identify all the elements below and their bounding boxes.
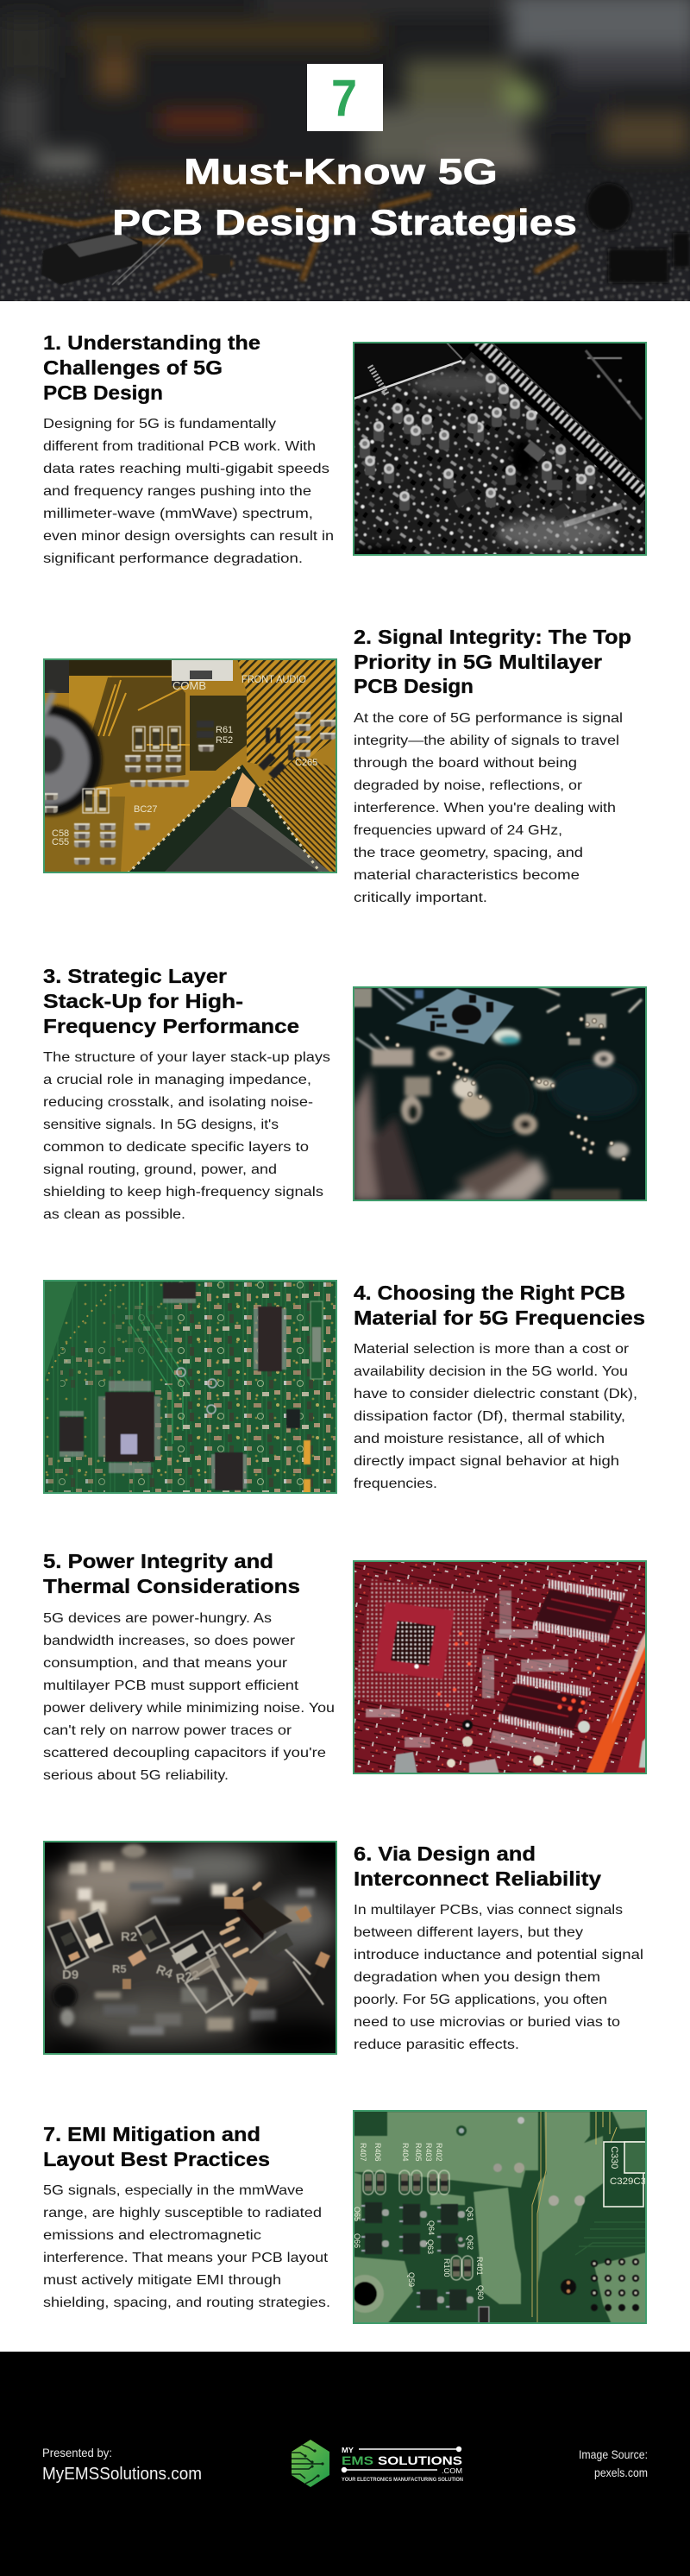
body text 4: dissipation factor (Df), thermal stability, xyxy=(354,1409,625,1424)
body text 5: scattered decoupling capacitors if you're xyxy=(43,1746,326,1760)
photo: dark circuit board close-up xyxy=(22,1825,367,2064)
badge: number 7: 7 xyxy=(331,69,357,127)
photo: gold circuit board: R52 xyxy=(216,735,233,746)
photo: dark circuit board close-up: D9 xyxy=(62,1968,78,1982)
photo: green circuit board xyxy=(43,1280,337,1494)
photo: sage green circuit board: Q60 xyxy=(476,2285,485,2300)
heading 5: 5. Power Integrity and xyxy=(43,1550,273,1572)
body text 7: interference. That means your PCB layout xyxy=(43,2251,329,2265)
body text 7: must actively mitigate EMI through xyxy=(43,2273,281,2288)
heading 3: 3. Strategic Layer xyxy=(43,965,227,987)
body text 6: In multilayer PCBs, vias connect signals xyxy=(354,1903,623,1918)
body text 2: material characteristics become xyxy=(354,868,580,883)
presented by: MyEMSSolutions.com xyxy=(42,2465,202,2484)
body text 6: need to use microvias or buried vias to xyxy=(354,2015,620,2030)
circuit speckle xyxy=(0,180,690,301)
body text 1: millimeter-wave (mmWave) spectrum, xyxy=(43,507,313,521)
heading 2: PCB Design xyxy=(354,675,474,697)
section 7: EMI mitigation xyxy=(43,2110,647,2324)
heading 7: Layout Best Practices xyxy=(43,2148,270,2170)
body text 5: power delivery while minimizing noise. You xyxy=(43,1701,335,1716)
photo: gold circuit board: R61 xyxy=(216,725,233,735)
footer xyxy=(0,2352,690,2576)
body text 6: degradation when you design them xyxy=(354,1970,600,1985)
photo: gold circuit board: C265 xyxy=(295,758,317,768)
body text 6 xyxy=(354,1903,643,2052)
heading 1 xyxy=(43,331,260,404)
photo: sage green circuit board: Q63 xyxy=(426,2239,435,2254)
body text 3: as clean as possible. xyxy=(43,1207,185,1222)
body text 1: even minor design oversights can result in xyxy=(43,529,334,544)
body text 6: between different layers, but they xyxy=(354,1925,583,1940)
photo: dark teal blurred board xyxy=(353,986,647,1201)
heading 1: Challenges of 5G xyxy=(43,356,223,379)
logo wordmark: MY xyxy=(342,2447,354,2454)
photo: sage green circuit board: R403 xyxy=(424,2143,433,2162)
title xyxy=(112,151,577,242)
heading 3: Frequency Performance xyxy=(43,1015,299,1037)
photo: gold circuit board xyxy=(0,658,337,873)
photo: black and white circuit board xyxy=(348,340,647,559)
photo: sage green circuit board: Q66 xyxy=(353,2233,361,2248)
badge: number 7 xyxy=(307,64,383,131)
presented by xyxy=(42,2446,202,2484)
heading 6: Interconnect Reliability xyxy=(354,1867,601,1890)
title: Must-Know 5G xyxy=(184,151,498,192)
body text 1: significant performance degradation. xyxy=(43,551,303,566)
body text 7 xyxy=(43,2183,330,2310)
heading 1: 1. Understanding the xyxy=(43,331,260,354)
header photo background xyxy=(0,0,690,301)
body text 2: through the board without being xyxy=(354,756,577,771)
heading 5 xyxy=(43,1550,300,1597)
body text 3: shielding to keep high-frequency signals xyxy=(43,1185,323,1200)
photo: dark circuit board close-up: R4 xyxy=(154,1962,175,1982)
body text 4: and moisture resistance, all of which xyxy=(354,1432,605,1446)
photo: gold circuit board: C58 xyxy=(52,828,69,839)
body text 3: The structure of your layer stack-up plays xyxy=(43,1050,330,1065)
section 5: power integrity xyxy=(43,1550,647,1783)
header banner xyxy=(0,0,690,301)
photo: sage green circuit board: R405 xyxy=(414,2143,423,2162)
photo: sage green circuit board: Q64 xyxy=(427,2220,436,2235)
body text 2: frequencies upward of 24 GHz, xyxy=(354,823,562,838)
logo wordmark: YOUR ELECTRONICS MANUFACTURING SOLUTION xyxy=(342,2478,463,2483)
logo wordmark: SOLUTIONS xyxy=(378,2453,462,2467)
body text 3: sensitive signals. In 5G designs, it's xyxy=(43,1118,279,1132)
body text 3 xyxy=(43,1050,330,1222)
body text 2 xyxy=(354,711,623,905)
logo wordmark xyxy=(342,2447,463,2483)
body text 5: can't rely on narrow power traces or xyxy=(43,1723,292,1738)
photo: gold circuit board: C55 xyxy=(52,837,69,847)
body text 3: signal routing, ground, power, and xyxy=(43,1162,277,1177)
heading 7: 7. EMI Mitigation and xyxy=(43,2123,260,2145)
body text 4: directly impact signal behavior at high xyxy=(354,1454,619,1469)
body text 4: have to consider dielectric constant (Dk), xyxy=(354,1387,637,1401)
photo: sage green circuit board: Q62 xyxy=(466,2235,474,2250)
body text 7: range, are highly susceptible to radiated xyxy=(43,2206,322,2220)
icon: hexagon circuit xyxy=(292,2440,329,2487)
body text 6: poorly. For 5G applications, you often xyxy=(354,1993,607,2007)
body text 1: different from traditional PCB work. With xyxy=(43,439,316,454)
body text 3: reducing crosstalk, and isolating noise- xyxy=(43,1095,313,1110)
image source: pexels.com xyxy=(594,2466,648,2479)
section 1: challenges xyxy=(43,331,647,566)
heading 2: Priority in 5G Multilayer xyxy=(354,651,602,673)
body text 7: shielding, spacing, and routing strategies. xyxy=(43,2296,330,2310)
heading 4: 4. Choosing the Right PCB xyxy=(354,1282,625,1304)
heading 6: 6. Via Design and xyxy=(354,1842,536,1865)
body text 2: interference. When you're dealing with xyxy=(354,801,616,816)
body text 5: serious about 5G reliability. xyxy=(43,1768,229,1783)
photo: red circuit board xyxy=(353,1560,647,1774)
body text 1: and frequency ranges pushing into the xyxy=(43,484,311,499)
heading 4 xyxy=(354,1282,645,1329)
body text 4: Material selection is more than a cost or xyxy=(354,1342,630,1357)
heading 6 xyxy=(354,1842,601,1890)
photo: sage green circuit board: Q59 xyxy=(407,2272,416,2287)
photo: sage green circuit board: R404 xyxy=(401,2143,410,2162)
section 2: signal integrity xyxy=(0,626,631,905)
heading 2: 2. Signal Integrity: The Top xyxy=(354,626,631,648)
body text 7: 5G signals, especially in the mmWave xyxy=(43,2183,304,2198)
body text 1: Designing for 5G is fundamentally xyxy=(43,417,276,431)
photo: sage green circuit board: C330 xyxy=(609,2146,619,2169)
photo: gold circuit board: BC27 xyxy=(134,804,158,815)
body text 4: frequencies. xyxy=(354,1477,437,1491)
body text 2: degraded by noise, reflections, or xyxy=(354,778,583,793)
image source: Image Source: xyxy=(579,2447,648,2461)
body text 7: emissions and electromagnetic xyxy=(43,2228,261,2243)
photo: sage green circuit board: Q65 xyxy=(353,2207,361,2221)
title: PCB Design Strategies xyxy=(112,202,577,242)
photo: sage green circuit board: C329C3 xyxy=(610,2176,646,2187)
heading 1: PCB Design xyxy=(43,381,163,404)
body text 2: integrity—the ability of signals to travel xyxy=(354,734,619,748)
heading 7 xyxy=(43,2123,270,2170)
heading 4: Material for 5G Frequencies xyxy=(354,1307,645,1329)
photo: gold circuit board: FRONT AUDIO xyxy=(242,673,306,685)
photo: dark circuit board close-up: R5 xyxy=(112,1962,127,1975)
body text 6: reduce parasitic effects. xyxy=(354,2037,519,2052)
body text 2: the trace geometry, spacing, and xyxy=(354,846,583,860)
photo: sage green circuit board xyxy=(346,2110,647,2324)
body text 5: consumption, and that means your xyxy=(43,1656,288,1671)
bokeh dots xyxy=(385,1017,626,1162)
footer background xyxy=(0,2352,690,2576)
body text 1: data rates reaching multi-gigabit speeds xyxy=(43,462,329,476)
presented by: Presented by: xyxy=(42,2446,112,2459)
image source xyxy=(579,2447,648,2479)
logo wordmark: EMS xyxy=(342,2453,373,2467)
body text 5: 5G devices are power-hungry. As xyxy=(43,1611,272,1626)
body text 2: At the core of 5G performance is signal xyxy=(354,711,623,726)
photo: sage green circuit board: R406 xyxy=(373,2143,382,2162)
photo: sage green circuit board: R402 xyxy=(435,2143,443,2162)
photo: dark circuit board close-up: R2 xyxy=(121,1930,137,1944)
heading 2 xyxy=(354,626,631,697)
heading 3: Stack-Up for High- xyxy=(43,990,243,1012)
heading 5: Thermal Considerations xyxy=(43,1575,300,1597)
section 3: layer stack-up xyxy=(43,965,647,1222)
body text 4: availability decision in the 5G world. You xyxy=(354,1364,628,1379)
photo: sage green circuit board: Q61 xyxy=(466,2207,474,2221)
photo: gold circuit board: COMB xyxy=(172,679,206,692)
body text 2: critically important. xyxy=(354,891,487,905)
section 6: via design xyxy=(22,1825,643,2064)
body text 1 xyxy=(43,417,334,566)
body text 5 xyxy=(43,1611,335,1783)
photo: sage green circuit board: R407 xyxy=(359,2143,367,2162)
body text 5: multilayer PCB must support efficient xyxy=(43,1678,299,1693)
body text 3: a crucial role in managing impedance, xyxy=(43,1073,311,1087)
photo: dark circuit board close-up: R22 xyxy=(175,1968,201,1987)
photo: sage green circuit board: R401 xyxy=(475,2257,484,2276)
logo xyxy=(292,2440,463,2487)
body text 3: common to dedicate specific layers to xyxy=(43,1140,309,1155)
body text 6: introduce inductance and potential signal xyxy=(354,1948,643,1962)
section 4: material xyxy=(43,1280,645,1494)
body text 5: bandwidth increases, so does power xyxy=(43,1634,296,1648)
heading 3 xyxy=(43,965,299,1037)
photo: sage green circuit board: R100 xyxy=(442,2258,451,2277)
logo wordmark: .COM xyxy=(442,2467,462,2475)
body text 4 xyxy=(354,1342,637,1491)
